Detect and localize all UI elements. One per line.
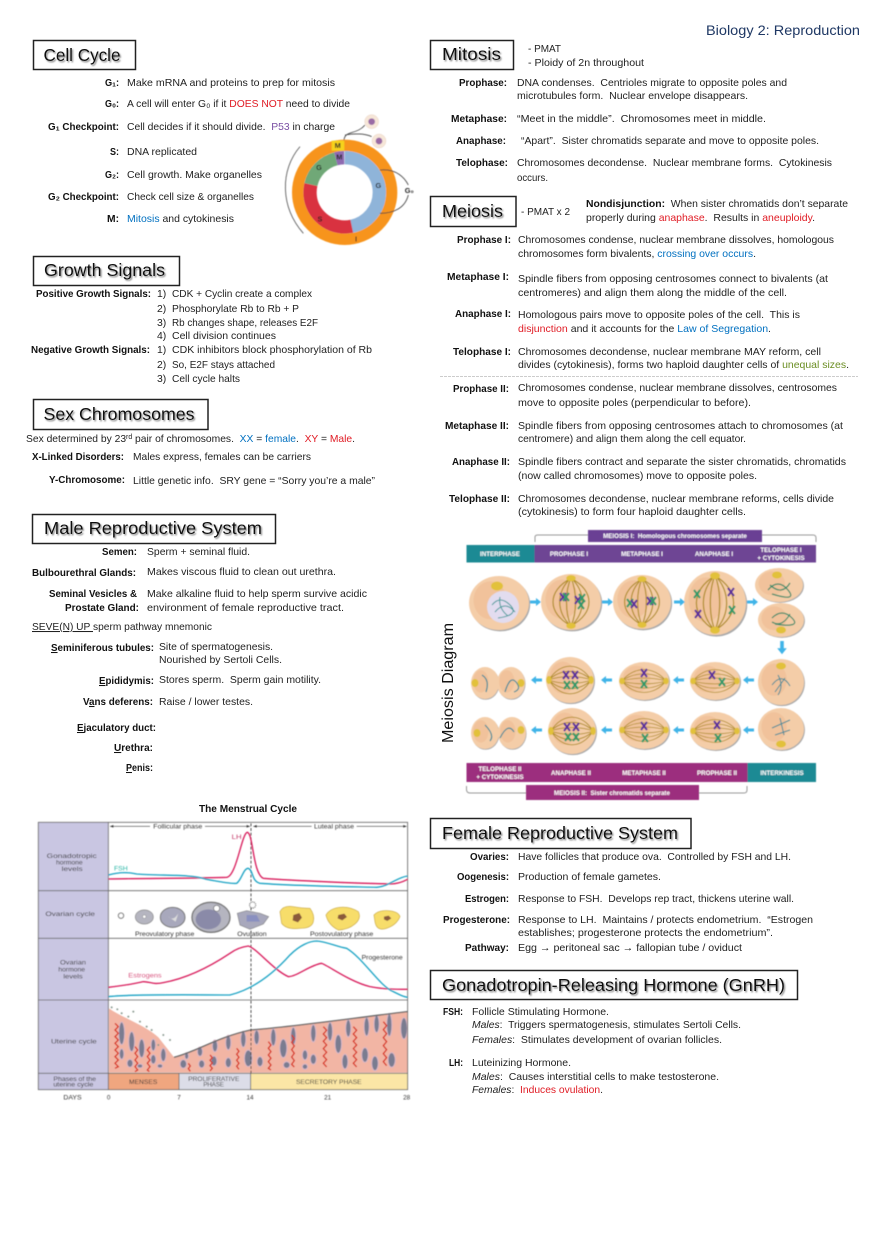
heading: Cell Cycle: Cell Cycle (44, 45, 120, 65)
positive growth signals: 4) (157, 331, 166, 342)
chart: menstrual cycle: Ovarian (60, 960, 87, 967)
heading: Cell Cycle (34, 40, 136, 70)
negative growth signals (31, 345, 372, 385)
y chromosome: Little genetic info. SRY gene = “Sorry you’re a male” (133, 476, 376, 487)
FSH (443, 1007, 741, 1046)
label: Meiosis Diagram: Meiosis Diagram (440, 623, 457, 743)
sex determination note: rd (126, 434, 132, 441)
chart: menstrual cycle: PHASE (203, 1082, 224, 1089)
telophase I: divides (cytokinesis), forms two haploid daughter cells of unequal sizes. (518, 360, 849, 371)
prophase I: Prophase I: (457, 235, 511, 246)
mnemonic: SEVE(N) UP sperm pathway mnemonic (32, 622, 212, 633)
heading: Mitosis (430, 40, 514, 70)
meiosis note: - PMAT x 2 (521, 207, 570, 218)
metaphase: Metaphase: (451, 114, 507, 125)
prophase: microtubules form. Nuclear envelope disappears. (517, 91, 748, 102)
x-linked disorders (32, 452, 311, 463)
seminal vesicles and prostate: Make alkaline fluid to help sperm survive acidic (147, 589, 367, 600)
anaphase I: Anaphase I: (455, 309, 511, 320)
LH: Luteinizing Hormone. (472, 1058, 571, 1069)
chart: meiosis diagram: METAPHASE II (622, 770, 666, 777)
heading: Male Reproductive System (32, 514, 276, 544)
chart: meiosis diagram: PROPHASE I (550, 551, 588, 558)
ovaries: Ovaries: (470, 852, 509, 863)
row: G2 checkpoint (48, 192, 254, 203)
telophase II: (cytokinesis) to form four haploid daughter cells. (518, 507, 746, 518)
chart: meiosis diagram: ANAPHASE II (551, 770, 591, 777)
ejaculatory duct: Ejaculatory duct: (77, 723, 156, 734)
anaphase I: disjunction and it accounts for the Law of Segregation. (518, 324, 771, 335)
telophase I (453, 347, 849, 371)
pathway: Egg → peritoneal sac → fallopian tube / oviduct (518, 943, 742, 954)
prophase I: Chromosomes condense, nuclear membrane dissolves, homologous (518, 235, 834, 246)
seminal vesicles and prostate: Prostate Gland: (65, 603, 139, 614)
LH (449, 1058, 719, 1096)
telophase: occurs. (517, 173, 548, 184)
row: G0: G₀: (105, 99, 119, 110)
chart: menstrual cycle: Progesterone (362, 955, 403, 962)
panel: sex chromosomes (26, 400, 376, 487)
chart: meiosis diagram: + CYTOKINESIS (476, 774, 524, 781)
oogenesis: Production of female gametes. (518, 872, 661, 883)
chart: menstrual cycle: SECRETORY PHASE (296, 1079, 362, 1086)
chart: cell cycle ring diagram: G₀ (405, 186, 414, 195)
estrogen: Estrogen: (465, 894, 509, 905)
chart: menstrual cycle: DAYS (63, 1095, 82, 1102)
heading: Growth Signals: Growth Signals (44, 260, 165, 280)
chart: menstrual cycle: Phases of the (53, 1076, 97, 1083)
anaphase II: Spindle fibers contract and separate the sister chromatids, chromatids (518, 457, 846, 468)
y chromosome: Y-Chromosome: (49, 475, 125, 486)
anaphase II: (now called chromosomes) move to opposite poles. (518, 471, 757, 482)
row: M: M: (107, 214, 119, 225)
row: G0: A cell will enter G₀ if it DOES NOT need to divide (127, 99, 350, 110)
chart: meiosis diagram: TELOPHASE I (760, 547, 802, 554)
chart: menstrual cycle: PROLIFERATIVE (188, 1076, 239, 1083)
positive growth signals: Cell division continues (172, 331, 276, 342)
chart: menstrual cycle: Luteal phase (314, 824, 354, 831)
chart: meiosis diagram: METAPHASE I (621, 551, 663, 558)
metaphase I (447, 272, 828, 299)
positive growth signals: CDK + Cyclin create a complex (172, 289, 313, 300)
epididymis: Stores sperm. Sperm gain motility. (159, 675, 321, 686)
mitosis notes: - PMAT (528, 44, 562, 55)
negative growth signals: 1) (157, 345, 166, 356)
panel: female reproductive system (430, 818, 813, 954)
mitosis notes (528, 44, 644, 69)
panel: growth signals (31, 256, 372, 385)
prophase II: move to opposite poles (perpendicular to before). (518, 398, 751, 409)
chart: cell cycle ring diagram: G (316, 163, 322, 172)
chart: menstrual cycle: levels (62, 866, 83, 873)
heading: The Menstrual Cycle: The Menstrual Cycle (199, 804, 297, 815)
negative growth signals: So, E2F stays attached (172, 360, 275, 371)
chart: menstrual cycle: Ovarian cycle (45, 911, 96, 918)
chart: meiosis diagram: + CYTOKINESIS (757, 555, 805, 562)
chart: menstrual cycle: Follicular phase (153, 824, 203, 831)
heading: Meiosis (430, 196, 516, 226)
chart: meiosis diagram: TELOPHASE II (479, 766, 522, 773)
chart: meiosis diagram: INTERKINESIS (760, 770, 804, 777)
row: G1 checkpoint: Cell decides if it should divide. P53 in charge (127, 122, 335, 133)
panel: mitosis (430, 40, 832, 184)
epididymis (99, 675, 321, 687)
LH: Males: Causes interstitial cells to make testosterone. (472, 1072, 719, 1083)
semen: Semen: (102, 547, 137, 558)
metaphase I: Spindle fibers from opposing centrosomes connect to bivalents (at (518, 274, 828, 285)
bulbourethral glands: Makes viscous fluid to clean out urethra. (147, 567, 336, 578)
panel: GnRH (430, 970, 798, 1096)
positive growth signals (36, 289, 318, 342)
negative growth signals: CDK inhibitors block phosphorylation of Rb (172, 345, 372, 356)
chart: menstrual cycle: Preovulatory phase (135, 931, 195, 938)
oogenesis: Oogenesis: (457, 872, 509, 883)
telophase II: Chromosomes decondense, nuclear membrane reforms, cells divide (518, 494, 834, 505)
prophase II: Prophase II: (453, 384, 509, 395)
sex determination note: pair of chromosomes. (132, 434, 240, 445)
metaphase II (445, 421, 843, 445)
pathway: Pathway: (465, 943, 509, 954)
FSH: Females: Stimulates development of ovarian follicles. (472, 1035, 722, 1046)
chart: meiosis diagram: PROPHASE II (697, 770, 737, 777)
anaphase I: Homologous pairs move to opposite poles of the cell. This is (518, 310, 800, 321)
heading: Female Reproductive System (430, 818, 691, 848)
chart: cell cycle ring diagram (285, 115, 414, 244)
positive growth signals: Phosphorylate Rb to Rb + P (172, 304, 299, 315)
chart: cell cycle ring diagram: I (355, 235, 357, 244)
row: M: Mitosis and cytokinesis (127, 214, 234, 225)
seminiferous tubules: Seminiferous tubules: (51, 643, 154, 654)
sex determination note: Sex determined by 23 (26, 434, 127, 445)
chart: menstrual cycle: levels (63, 974, 83, 981)
chart: meiosis diagram: MEIOSIS II: Sister chromatids separate (554, 790, 670, 797)
anaphase: Anaphase: (456, 136, 506, 147)
negative growth signals: Negative Growth Signals: (31, 345, 150, 356)
telophase: Telophase: (456, 158, 508, 169)
LH: LH: (449, 1058, 463, 1069)
panel: male reproductive system (32, 514, 367, 774)
anaphase: “Apart”. Sister chromatids separate and move to opposite poles. (521, 136, 819, 147)
chart: menstrual cycle: Uterine cycle (51, 1039, 97, 1046)
chart: menstrual cycle: uterine cycle (53, 1082, 94, 1089)
nondisjunction (586, 199, 848, 224)
positive growth signals: 3) (157, 318, 166, 329)
heading: Sex Chromosomes (34, 400, 208, 430)
negative growth signals: Cell cycle halts (172, 374, 240, 385)
FSH: Males: Triggers spermatogenesis, stimulates Sertoli Cells. (472, 1020, 741, 1031)
bulbourethral glands: Bulbourethral Glands: (32, 568, 136, 579)
x-linked disorders: Males express, females can be carriers (133, 452, 311, 463)
chart: meiosis diagram: MEIOSIS I: Homologous chromosomes separate (603, 533, 747, 540)
LH: Females: Induces ovulation. (472, 1085, 603, 1096)
heading: Female Reproductive System: Female Reproductive System (442, 823, 678, 843)
heading: Growth Signals (34, 256, 180, 286)
chart: cell cycle ring diagram: M (336, 153, 342, 162)
row: G1: Make mRNA and proteins to prep for mitosis (127, 78, 335, 89)
anaphase II: Anaphase II: (452, 457, 510, 468)
semen: Sperm + seminal fluid. (147, 547, 250, 558)
negative growth signals: 2) (157, 360, 166, 371)
nondisjunction: properly during anaphase. Results in aneuploidy. (586, 213, 815, 224)
chart: menstrual cycle: 14 (246, 1095, 254, 1102)
oogenesis (457, 872, 661, 883)
x-linked disorders: X-Linked Disorders: (32, 452, 124, 463)
prophase I: chromosomes form bivalents, crossing over occurs. (518, 249, 756, 260)
vans deferens: Vans deferens: (83, 697, 153, 708)
chart: menstrual cycle: Ovulation (237, 931, 267, 938)
chart: cell cycle ring diagram: S (318, 215, 323, 224)
sex determination note: XX = female. XY = Male. (240, 434, 355, 445)
row: G2 checkpoint: G₂ Checkpoint: (48, 192, 119, 203)
telophase (456, 158, 832, 184)
metaphase: “Meet in the middle”. Chromosomes meet in middle. (517, 114, 766, 125)
heading: Sex Chromosomes: Sex Chromosomes (44, 404, 195, 424)
seminal vesicles and prostate: environment of female reproductive tract. (147, 603, 344, 614)
heading: Gonadotropin-Releasing Hormone (GnRH) (430, 970, 798, 1000)
heading: Gonadotropin-Releasing Hormone (GnRH): Gonadotropin-Releasing Hormone (GnRH) (442, 975, 785, 995)
urethra: Urethra: (114, 743, 153, 754)
y chromosome (49, 475, 376, 487)
metaphase I: Metaphase I: (447, 272, 509, 283)
chart: menstrual cycle: MENSES (129, 1079, 157, 1086)
telophase: Chromosomes decondense. Nuclear membrane forms. Cytokinesis (517, 158, 832, 169)
metaphase I: centromeres) and align them along the middle of the cell. (518, 288, 787, 299)
progesterone: Response to LH. Maintains / protects endometrium. “Estrogen (518, 915, 813, 926)
chart: menstrual cycle: 21 (324, 1095, 332, 1102)
progesterone: Progesterone: (443, 915, 510, 926)
row: G1 checkpoint: G₁ Checkpoint: (48, 122, 119, 133)
chart: menstrual cycle: 7 (177, 1095, 181, 1102)
penis: Penis: (126, 763, 153, 774)
estrogen: Response to FSH. Develops rep tract, thickens uterine wall. (518, 894, 794, 905)
chart: cell cycle ring diagram: M (335, 141, 341, 150)
chart: menstrual cycle: Estrogens (128, 973, 162, 980)
seminiferous tubules (51, 642, 282, 666)
chart: menstrual cycle: LH (232, 834, 242, 841)
epididymis: Epididymis: (99, 676, 154, 687)
telophase II (449, 494, 834, 518)
chart: menstrual cycle: hormone (56, 859, 83, 866)
row: G1: G₁: (105, 78, 119, 89)
chart: meiosis diagram: ANAPHASE I (695, 551, 733, 558)
seminal vesicles and prostate: Seminal Vesicles & (49, 589, 137, 600)
metaphase II: Metaphase II: (445, 421, 509, 432)
negative growth signals: 3) (157, 374, 166, 385)
bulbourethral glands (32, 567, 336, 579)
row: G2: G₂: (105, 170, 119, 181)
prophase: Prophase: (459, 78, 507, 89)
metaphase II: Spindle fibers from opposing centrosomes attach to chromosomes (at (518, 421, 843, 432)
heading: Male Reproductive System: Male Reproductive System (44, 518, 262, 538)
positive growth signals: Positive Growth Signals: (36, 289, 151, 300)
row: S: DNA replicated (127, 147, 197, 158)
chart: menstrual cycle: hormone (58, 966, 85, 973)
ovaries: Have follicles that produce ova. Controlled by FSH and LH. (518, 852, 791, 863)
row: S: S: (110, 147, 119, 158)
row: G2 checkpoint: Check cell size & organelles (127, 192, 254, 203)
mitosis notes: - Ploidy of 2n throughout (528, 58, 644, 69)
telophase I: Chromosomes decondense, nuclear membrane MAY reform, cell (518, 347, 821, 358)
seminiferous tubules: Site of spermatogenesis. (159, 642, 273, 653)
chart: meiosis diagram (466, 530, 816, 800)
vans deferens: Raise / lower testes. (159, 697, 253, 708)
progesterone (443, 915, 813, 939)
chart: menstrual cycle: 28 (403, 1095, 411, 1102)
metaphase II: centromere) and align them along the cell equator. (518, 434, 746, 445)
positive growth signals: 2) (157, 304, 166, 315)
anaphase II (452, 457, 846, 482)
chart: meiosis diagram: INTERPHASE (480, 551, 520, 558)
panel: meiosis (430, 196, 858, 518)
seminiferous tubules: Nourished by Sertoli Cells. (159, 655, 282, 666)
nondisjunction: Nondisjunction: When sister chromatids don’t separate (586, 199, 848, 210)
chart: cell cycle ring diagram: G (375, 181, 381, 190)
heading: Mitosis: Mitosis (442, 44, 501, 64)
vans deferens (83, 697, 253, 708)
anaphase I (455, 309, 800, 335)
seminal vesicles and prostate (49, 589, 367, 614)
page title: Biology 2: Reproduction (706, 22, 860, 38)
chart: menstrual cycle (38, 822, 411, 1102)
heading: Meiosis: Meiosis (442, 201, 503, 221)
telophase I: Telophase I: (453, 347, 511, 358)
prophase II (453, 383, 837, 409)
row: G2: Cell growth. Make organelles (127, 170, 262, 181)
chart: menstrual cycle: 0 (107, 1095, 111, 1102)
chart: menstrual cycle: FSH (114, 865, 128, 872)
chart: menstrual cycle: Postovulatory phase (310, 931, 374, 938)
prophase I (457, 235, 834, 260)
prophase (459, 78, 787, 102)
prophase: DNA condenses. Centrioles migrate to opposite poles and (517, 78, 787, 89)
prophase II: Chromosomes condense, nuclear membrane dissolves, centrosomes (518, 383, 837, 394)
positive growth signals: 1) (157, 289, 166, 300)
progesterone: establishes; progesterone protects the endometrium”. (518, 928, 773, 939)
panel: cell cycle (34, 40, 414, 244)
chart: menstrual cycle: Gonadotropic (47, 853, 97, 860)
positive growth signals: Rb changes shape, releases E2F (172, 318, 318, 329)
telophase II: Telophase II: (449, 494, 510, 505)
semen (102, 547, 250, 558)
FSH: FSH: (443, 1007, 463, 1018)
FSH: Follicle Stimulating Hormone. (472, 1007, 609, 1018)
